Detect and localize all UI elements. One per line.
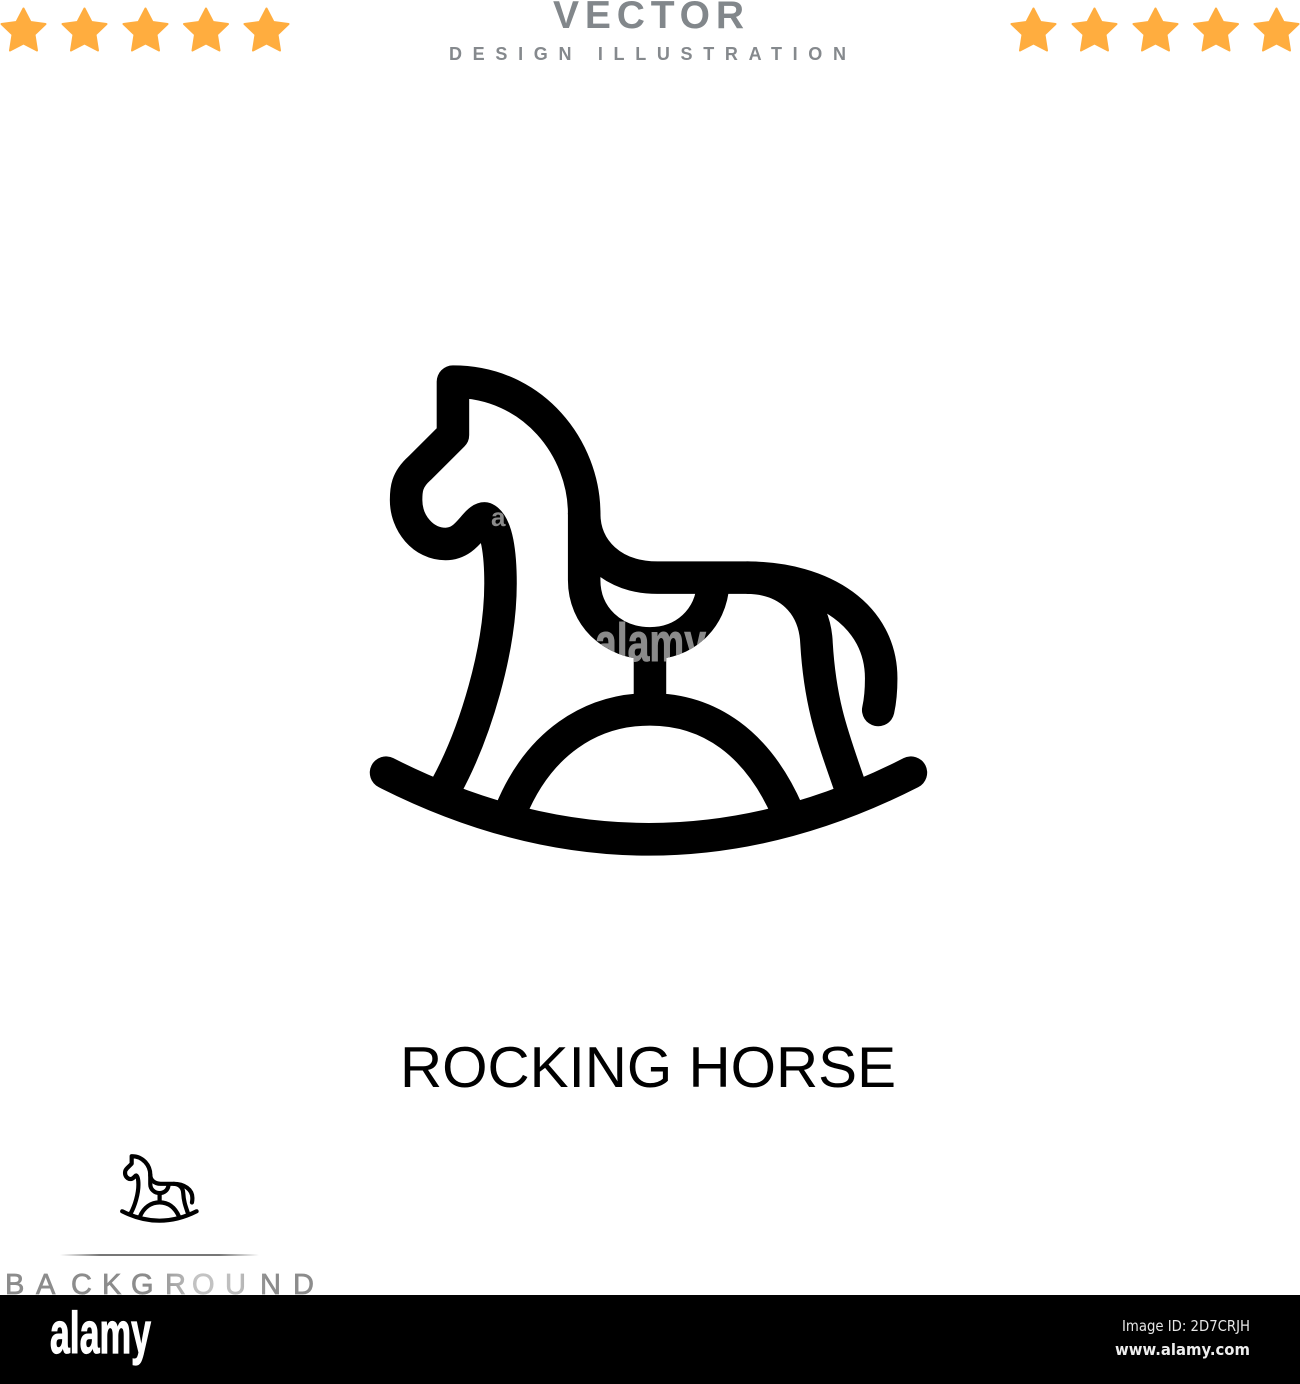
stars: left rating row (2, 8, 288, 50)
support post (634, 643, 666, 710)
icon: small rocking horse (122, 1156, 197, 1221)
saddle (584, 513, 713, 643)
rocker arch (511, 709, 788, 812)
stars: right rating row (1012, 8, 1298, 50)
watermark: alamy over saddle: a (491, 502, 506, 532)
horse back and tail (584, 513, 881, 710)
website: www.alamy.com (1115, 1340, 1250, 1359)
footer bar (0, 1295, 1300, 1384)
watermark: alamy over saddle (491, 502, 706, 673)
subheading: DESIGN ILLUSTRATION: DESIGN ILLUSTRATION (449, 44, 846, 64)
title: ROCKING HORSE: ROCKING HORSE (400, 1036, 896, 1100)
label: BACKGROUND: BACKGROUND (5, 1269, 314, 1301)
footer background (0, 1295, 1300, 1384)
watermark: alamy over saddle: alamy (595, 613, 706, 673)
logo: alamy: alamy (50, 1301, 151, 1366)
image id: Image ID: 2D7CRJH (1122, 1317, 1250, 1335)
rear leg (747, 578, 850, 787)
icon: large rocking horse (386, 382, 911, 839)
horse head, neck and front leg (406, 382, 584, 787)
divider line (60, 1254, 259, 1256)
rocker base (386, 773, 911, 839)
